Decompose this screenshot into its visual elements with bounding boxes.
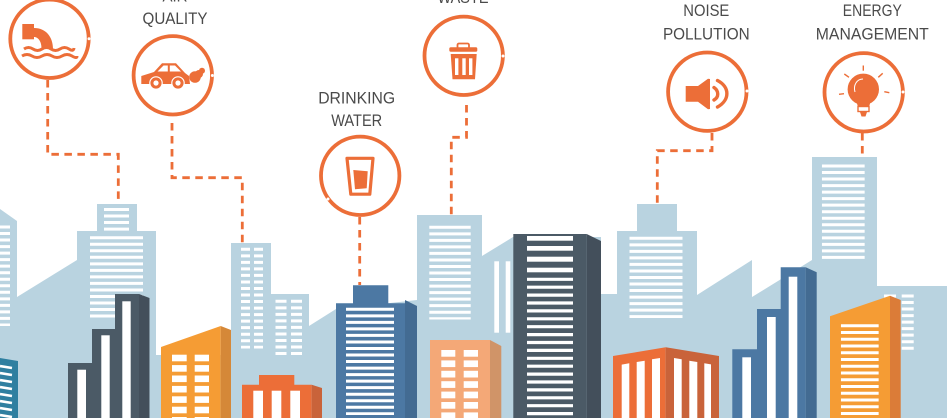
label: energy management: [816, 1, 929, 43]
label: energy management: MANAGEMENT: [816, 24, 929, 43]
label: noise pollution: POLLUTION: [663, 24, 750, 43]
building: peach: [430, 340, 501, 418]
connector: drinking water: [358, 217, 361, 285]
connector: air quality: [172, 123, 242, 243]
icon: water pollution pipe: [10, 0, 90, 78]
label: air quality: [142, 0, 208, 28]
connector: noise pollution: [657, 133, 712, 204]
skyline silhouette background: [0, 157, 947, 418]
icon: waste bin: [424, 17, 504, 95]
building: red-orange low: [242, 375, 322, 418]
icon: drinking water glass: [321, 137, 399, 215]
building: red-orange gabled: [613, 347, 719, 418]
connector: waste: [451, 105, 466, 215]
building: blue stepped: [732, 267, 817, 418]
icon: light bulb: [824, 53, 904, 131]
building: orange: [161, 326, 231, 418]
label: air quality: QUALITY: [142, 9, 208, 28]
label: drinking water: DRINKING: [318, 88, 395, 107]
icon: loudspeaker: [668, 52, 748, 131]
icon: car exhaust: [134, 36, 214, 114]
connector: energy management: [861, 133, 864, 157]
building: orange right: [830, 296, 901, 418]
label: drinking water: [318, 88, 395, 130]
building: teal left: [0, 358, 18, 418]
label: noise pollution: [663, 1, 750, 43]
building: dark tall tower: [513, 234, 601, 418]
connector: water pollution: [48, 80, 118, 204]
building: dark stepped: [68, 294, 150, 418]
label: drinking water: WATER: [331, 111, 382, 130]
building: blue tower: [336, 285, 417, 418]
label: energy management: ENERGY: [843, 1, 902, 20]
label: noise pollution: NOISE: [683, 1, 729, 20]
